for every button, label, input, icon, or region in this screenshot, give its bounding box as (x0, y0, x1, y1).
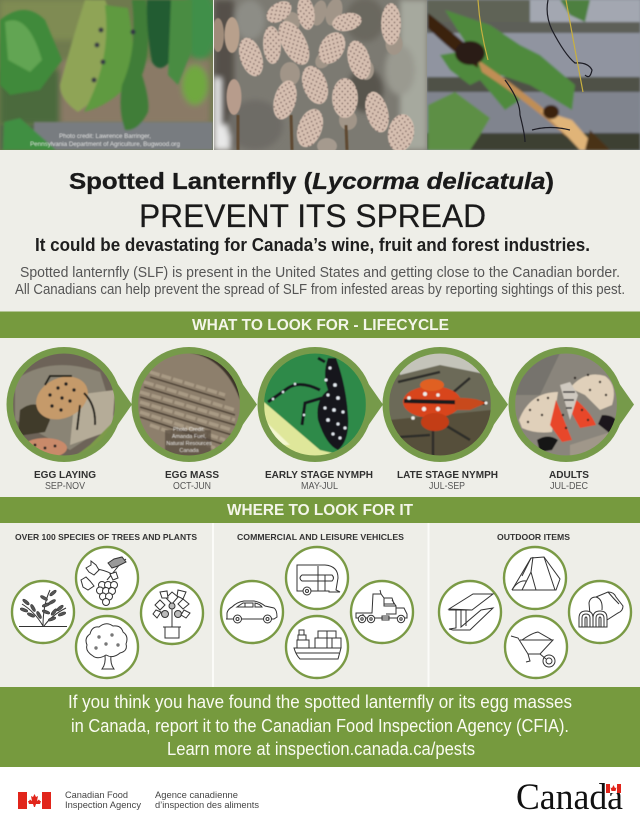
column titles: OUTDOOR ITEMS (497, 532, 570, 542)
photo credit: Photo Credit: (173, 427, 206, 433)
agency name: Canadian Food (65, 790, 128, 801)
lifecycle labels: MAY-JUL (301, 481, 338, 492)
icon: logs (569, 581, 631, 643)
lifecycle labels: SEP-NOV (45, 481, 85, 492)
lifecycle labels (34, 469, 589, 492)
icon: tent (504, 547, 566, 609)
call to action band: in Canada, report it to the Canadian Food Inspection Agency (CFIA). (71, 716, 569, 736)
call to action band: If you think you have found the spotted lanternfly or its egg masses (68, 692, 572, 712)
icon: plant (12, 581, 74, 643)
lifecycle labels: EGG LAYING (34, 469, 96, 481)
photo: adult lanternflies on bark (212, 0, 427, 154)
Canada wordmark: Canada (516, 777, 623, 818)
photo credit: Canada (179, 448, 200, 454)
column titles: COMMERCIAL AND LEISURE VEHICLES (237, 532, 404, 542)
lifecycle: adults (508, 347, 634, 462)
photo: vine with sap (427, 0, 640, 150)
agency name: d’inspection des aliments (155, 800, 259, 811)
headline: PREVENT ITS SPREAD (139, 198, 486, 234)
agency name: Agence canadienne (155, 790, 238, 801)
icon: Canadian flag (18, 792, 51, 809)
photo credit (166, 427, 212, 454)
section band: where to look (0, 497, 640, 523)
lifecycle labels: EGG MASS (165, 469, 219, 481)
lifecycle: early stage nymph (258, 347, 383, 462)
column titles: OVER 100 SPECIES OF TREES AND PLANTS (15, 532, 197, 542)
icon: steel beam (439, 581, 501, 643)
lifecycle labels: OCT-JUN (173, 481, 211, 492)
agency name (65, 790, 259, 811)
intro paragraph: Spotted lanternfly (SLF) is present in the United States and getting close to the Canadian border. (20, 265, 620, 281)
photo credit: Amanda Fuel, (172, 434, 207, 440)
lifecycle: egg laying (6, 347, 132, 462)
icon: camper (286, 547, 348, 609)
subheading: It could be devastating for Canada’s wine, fruit and forest industries. (35, 235, 590, 255)
photo credit: Pennsylvania Department of Agriculture, Bugwood.org (30, 142, 180, 148)
icon: car (221, 581, 283, 643)
lifecycle labels: LATE STAGE NYMPH (397, 469, 498, 481)
agency name: Inspection Agency (65, 800, 141, 811)
section band: lifecycle (0, 312, 640, 338)
section band: lifecycle: WHAT TO LOOK FOR - LIFECYCLE (192, 317, 449, 334)
footer background (0, 767, 640, 828)
lifecycle labels: EARLY STAGE NYMPH (265, 469, 373, 481)
icon: truck (351, 581, 413, 643)
lifecycle labels: ADULTS (549, 469, 589, 481)
lifecycle: egg mass (132, 347, 257, 462)
call to action band (0, 687, 640, 767)
photo: damaged green leaves (0, 0, 218, 150)
lifecycle labels: JUL-SEP (429, 481, 465, 492)
lifecycle: late stage nymph (382, 347, 508, 462)
icon: grapes (76, 547, 138, 609)
lifecycle labels: JUL-DEC (550, 481, 588, 492)
photo credit: Photo credit: Lawrence Barringer, (59, 134, 151, 140)
photo credit: Natural Resources (166, 441, 212, 447)
call to action band: Learn more at inspection.canada.ca/pests (167, 739, 475, 759)
title: Spotted Lanternfly ( Lycorma delicatula ) (69, 168, 554, 194)
icon: wheelbarrow (505, 616, 567, 678)
icon: cargo ship (286, 616, 348, 678)
column titles (15, 532, 570, 542)
icon: tree (76, 616, 138, 678)
section band: where to look: WHERE TO LOOK FOR IT (227, 502, 414, 519)
intro paragraph (15, 265, 625, 298)
icon: potted tree (141, 582, 203, 644)
photo credit (30, 134, 180, 148)
